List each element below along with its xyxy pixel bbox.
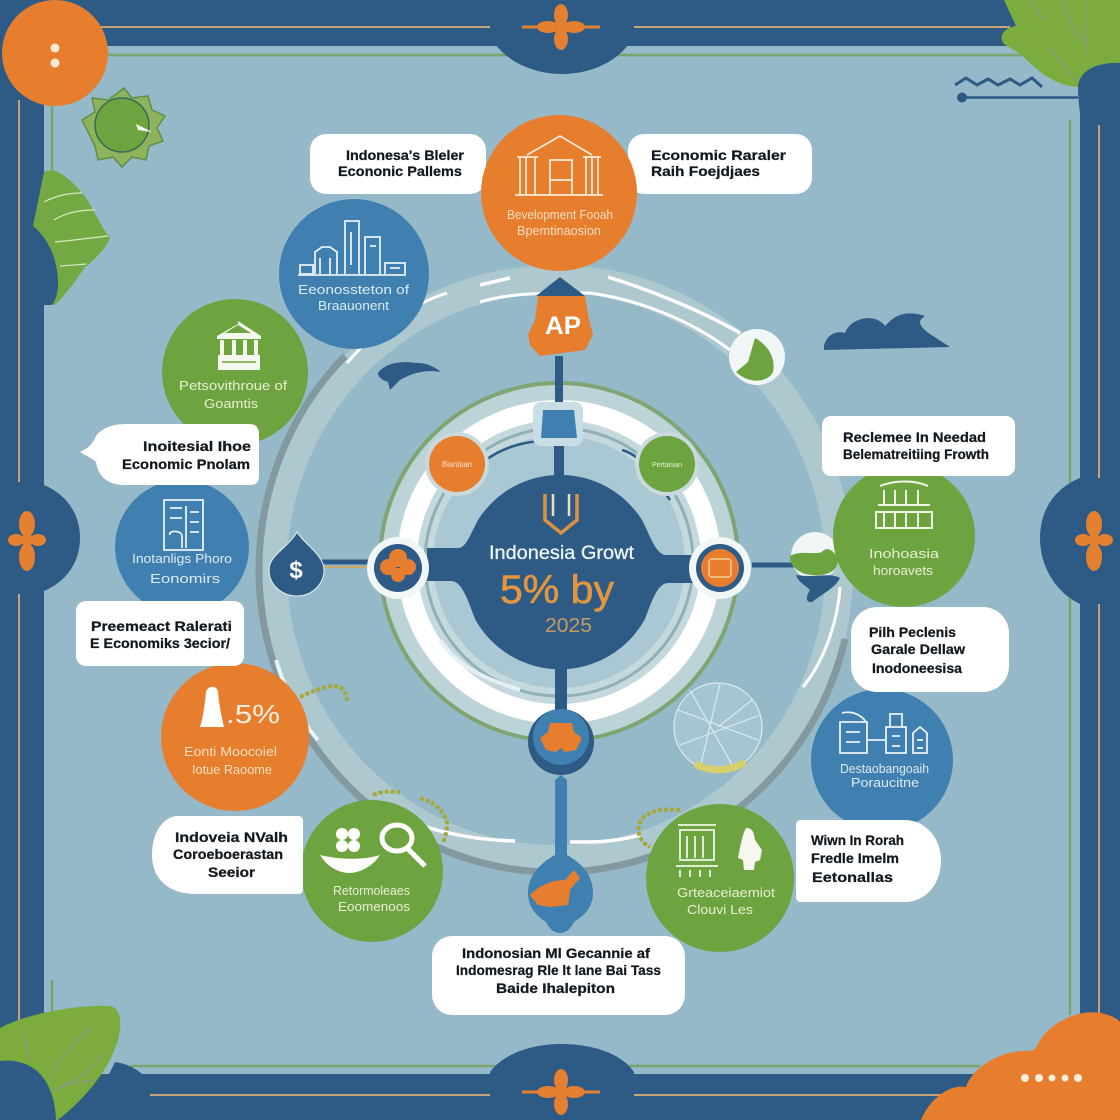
top-right leaf badge — [729, 329, 785, 385]
vine accents — [300, 686, 680, 847]
circle: orange lower left — [161, 663, 309, 811]
label: bottom right: Fredle Imelm — [811, 850, 899, 866]
circle: green upper left — [162, 299, 308, 445]
right medallion — [1040, 478, 1120, 604]
corner: top-left orange circle — [2, 0, 108, 106]
glass globe — [674, 683, 762, 771]
circle: blue upper left: Eeonossteton of — [298, 283, 410, 297]
circle: green bottom left: Eoomenoos — [338, 900, 410, 914]
label: top left: Indonesa's Bleler — [346, 147, 465, 163]
circle: orange lower left: Iotue Raoome — [192, 763, 272, 777]
circle: blue left — [115, 480, 249, 614]
label: right lower: Pilh Peclenis — [869, 624, 956, 640]
small green circle: Pertanian — [652, 462, 682, 469]
circle: green bottom left: Retormoleaes — [333, 884, 410, 898]
circle: green bottom right — [646, 804, 794, 952]
label: left lower: E Economiks 3ecior/ — [90, 635, 230, 651]
circle: top orange — [481, 115, 637, 271]
outer ring — [259, 277, 845, 872]
left drop icon — [269, 532, 324, 596]
central figure: 5% by — [500, 568, 614, 612]
label: left upper — [80, 424, 259, 485]
icon: upper hub — [533, 402, 583, 446]
label: top left — [310, 134, 486, 194]
label: bottom right: Eetonallas — [812, 869, 893, 885]
label: bottom center: Indomesrag Rle lt lane Bai Tass — [456, 962, 661, 978]
central title: Indonesia Growt — [489, 543, 635, 564]
bottom orange flower icon — [528, 775, 593, 933]
bottom medallion — [490, 1044, 634, 1120]
left leaf ornament — [33, 170, 110, 305]
small green circle — [635, 432, 699, 496]
circle: orange lower left: .5% — [226, 699, 280, 729]
label: right lower: Garale Dellaw — [871, 641, 965, 657]
circle: top orange: Bevelopment Fooah — [507, 208, 613, 222]
central emblem — [545, 494, 577, 533]
label: right upper — [822, 416, 1015, 476]
circle: green bottom right: Clouvi Les — [687, 903, 753, 917]
circle: green upper left: Petsovithroue of — [179, 379, 288, 393]
circle: blue lower right — [811, 689, 953, 831]
top hub: AP badge: AP — [545, 312, 581, 340]
circle: green bottom left — [301, 800, 443, 942]
connectors — [320, 356, 795, 712]
label: bottom center — [432, 936, 685, 1015]
circle: blue upper left: Braauonent — [318, 299, 390, 313]
corner: top-right leaf — [1002, 0, 1120, 125]
label: bottom center: Indonosian Ml Gecannie af — [462, 945, 650, 961]
circle: blue left: Inotanligs Phoro — [132, 552, 232, 566]
corner: bottom-left leaf — [0, 1006, 150, 1120]
label: bottom left: Coroeboerastan — [173, 846, 283, 862]
circle: top orange: Bpemtinaosion — [517, 224, 601, 238]
circle: green upper left: Goamtis — [204, 397, 258, 411]
label: left upper: Economic Pnolam — [122, 456, 250, 472]
central year: 2025 — [545, 615, 592, 637]
label: bottom center: Baide Ihalepiton — [496, 980, 615, 996]
circle: blue lower right: Destaobangoaih — [840, 762, 929, 776]
top-right wave ornament — [955, 78, 1078, 101]
circle: green bottom right: Grteaceiaemiot — [677, 886, 776, 900]
left medallion — [0, 482, 80, 594]
circle: green right: Inohoasia — [869, 547, 939, 561]
label: bottom right: Wiwn In Rorah — [811, 832, 904, 848]
small orange circle — [425, 432, 489, 496]
right bird icon — [790, 532, 840, 602]
circle: orange lower left: Eonti Moocoiel — [184, 745, 277, 759]
label: left upper: Inoitesial Ihoe — [143, 438, 251, 454]
small orange circle: Bisnisan — [442, 460, 472, 469]
label: right upper: Reclemee In Needad — [843, 429, 986, 445]
whale ornament — [378, 362, 441, 390]
label: bottom left — [152, 816, 303, 894]
top medallion — [490, 0, 634, 74]
label: right upper: Belematreitiing Frowth — [843, 446, 989, 462]
top-left green star ornament — [82, 88, 165, 167]
label: top right: Economic Raraler — [651, 147, 787, 163]
label: top left: Econonic Pallems — [338, 163, 462, 179]
label: bottom right — [796, 820, 941, 902]
central panel — [427, 475, 695, 669]
circle: blue left: Eonomirs — [150, 572, 220, 586]
label: left lower: Preemeact Ralerati — [91, 618, 232, 634]
label: right lower — [851, 607, 1009, 692]
label: left lower — [76, 601, 244, 666]
right node — [689, 537, 751, 599]
circle: blue upper left — [279, 199, 429, 349]
circle: green right — [833, 465, 975, 607]
bottom hub — [528, 709, 594, 775]
inner rings — [380, 383, 738, 741]
label: top right: Raih Foejdjaes — [651, 163, 760, 179]
label: bottom left: Indoveia NValh — [175, 829, 288, 845]
circle: green right: horoavets — [873, 564, 933, 578]
label: bottom left: Seeior — [208, 864, 256, 880]
cloud ornament — [824, 313, 950, 350]
label: right lower: Inodoneesisa — [872, 660, 962, 676]
label: top right — [628, 134, 812, 194]
left node — [367, 537, 429, 599]
upper stem knob of bottom hub — [552, 654, 568, 670]
left drop icon: $ — [289, 557, 303, 584]
circle: blue lower right: Poraucitne — [851, 776, 919, 790]
top hub: AP badge — [528, 277, 593, 356]
corner: bottom-right orange cloud — [921, 1012, 1120, 1120]
